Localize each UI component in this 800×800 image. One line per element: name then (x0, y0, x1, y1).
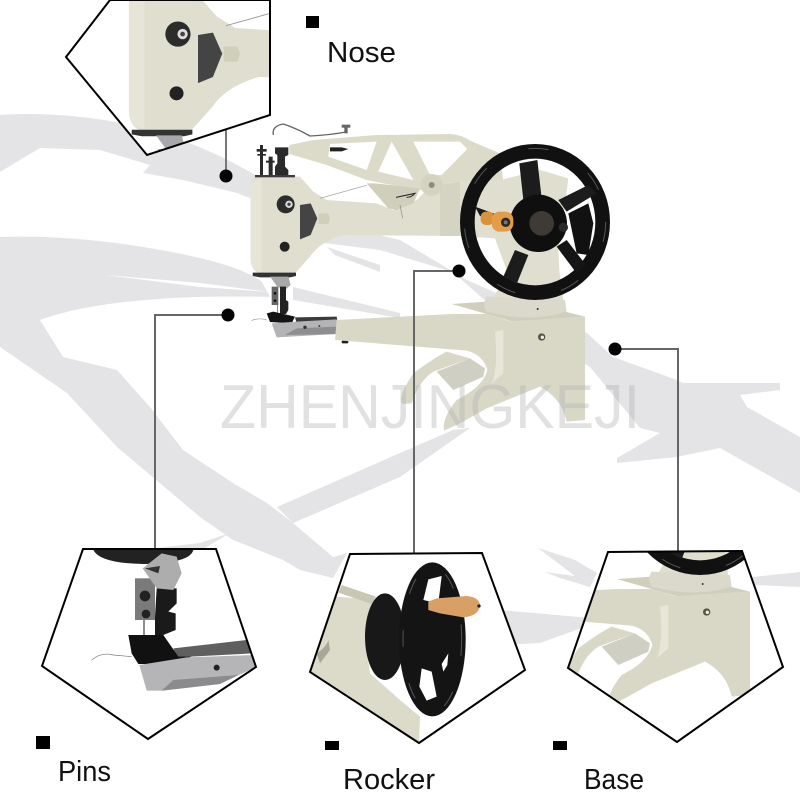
leader line: pins (155, 308, 234, 549)
panel: base inset (566, 550, 784, 744)
label: base (553, 741, 644, 796)
panel: nose inset (64, 0, 271, 156)
panel: rocker inset (310, 553, 525, 743)
sewing machine main photo (251, 124, 606, 431)
label: base: Base (584, 764, 644, 796)
leader line: rocker (414, 264, 466, 553)
label: nose: Nose (327, 37, 396, 69)
label: pins (36, 736, 111, 788)
leader line: nose (220, 130, 232, 182)
white brush gaps (20, 158, 270, 292)
background brush strokes (0, 114, 800, 645)
leader line: base (608, 342, 678, 551)
label: rocker: Rocker (343, 764, 435, 796)
watermark: ZHENJINGKEJI (220, 373, 640, 442)
label: nose (306, 16, 396, 69)
label: pins: Pins (58, 756, 111, 788)
panel: pins inset (42, 549, 257, 739)
label: rocker (325, 741, 435, 796)
